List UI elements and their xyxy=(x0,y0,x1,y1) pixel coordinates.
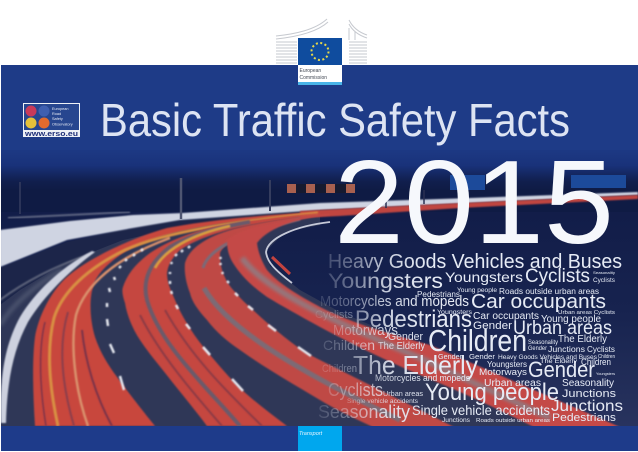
word cloud: Motorways xyxy=(333,322,398,339)
European Commission logo xyxy=(298,38,342,85)
word cloud: Children xyxy=(323,337,375,353)
European Commission building xyxy=(276,19,367,63)
roadside barrier xyxy=(8,212,130,218)
gantry poles xyxy=(180,178,182,219)
word cloud: Seasonality xyxy=(593,270,615,275)
word cloud: Junctions xyxy=(551,398,623,415)
word cloud: Cyclists xyxy=(587,345,615,354)
word cloud: Youngsters xyxy=(445,269,523,285)
word cloud: Young people xyxy=(425,379,559,406)
word cloud: The Elderly xyxy=(353,350,478,380)
word cloud: The Elderly xyxy=(378,341,425,352)
word cloud: Cyclists xyxy=(315,309,353,321)
word cloud: Cyclists xyxy=(593,278,615,284)
band A orange and dark streaks xyxy=(41,213,318,426)
word cloud: Urban areas xyxy=(513,318,612,339)
word cloud: Urban areas xyxy=(484,378,541,389)
Transport tab xyxy=(298,426,342,451)
word cloud: Gender xyxy=(438,354,463,361)
word cloud: Gender xyxy=(473,320,512,332)
word cloud: Youngsters xyxy=(596,371,615,376)
word cloud: Youngsters xyxy=(487,360,527,369)
word cloud: Seasonality xyxy=(318,402,410,422)
word cloud: Pedestrians xyxy=(552,412,617,424)
word cloud: Children xyxy=(322,363,357,375)
word cloud: Youngsters xyxy=(437,310,472,316)
Transport tab: Transport xyxy=(299,431,323,437)
far lane red trail xyxy=(300,195,638,218)
European Commission logo: European xyxy=(300,68,321,74)
word cloud: Young people xyxy=(541,314,601,325)
word cloud: Single vehicle accidents xyxy=(412,402,550,418)
word cloud: Junctions xyxy=(548,345,585,354)
word cloud: Motorways xyxy=(479,367,528,377)
word cloud: Gender xyxy=(528,346,547,352)
word cloud: Youngsters xyxy=(328,270,443,293)
word cloud: Seasonality xyxy=(528,340,558,346)
blue road signs xyxy=(450,175,626,190)
word cloud: Children xyxy=(598,354,615,360)
word cloud: Single vehicle accidents xyxy=(347,399,418,405)
inner white road edge xyxy=(266,222,330,283)
ERSO logo: European xyxy=(52,107,68,111)
ERSO logo: Road xyxy=(52,112,61,116)
word cloud: Gender xyxy=(388,331,423,343)
word cloud: Roads outside urban areas xyxy=(476,418,551,424)
word cloud: Seasonality xyxy=(562,378,614,389)
light trails band A xyxy=(33,212,320,426)
word cloud: Gender xyxy=(528,357,595,382)
word cloud: Urban areas Cyclists xyxy=(558,310,615,316)
word cloud: Motorcycles and mopeds xyxy=(320,293,469,310)
light trails band D xyxy=(226,216,620,426)
band D pale streak xyxy=(242,258,550,418)
word cloud: Pedestrians xyxy=(417,290,460,299)
word cloud: The Elderly xyxy=(558,334,607,345)
word cloud: Cyclists xyxy=(328,380,383,400)
word cloud: Cyclists xyxy=(525,266,590,287)
band B streaks xyxy=(140,222,262,426)
word cloud: Car occupants xyxy=(471,291,606,313)
overhead red signals xyxy=(287,184,355,193)
word cloud: Children xyxy=(581,357,611,367)
light trails band B xyxy=(122,213,320,426)
ERSO logo: Observatory xyxy=(52,122,73,126)
road surface xyxy=(1,211,514,418)
word cloud: Roads outside urban areas xyxy=(499,287,599,296)
light trails band C xyxy=(184,214,454,426)
highway night photo xyxy=(0,145,638,440)
word cloud: Gender xyxy=(469,354,496,361)
bottom band xyxy=(1,426,638,451)
word cloud: Motorcycles and mopeds xyxy=(375,373,470,383)
ERSO logo: www.erso.eu xyxy=(24,131,78,138)
word cloud: Heavy Goods Vehicles and Buses xyxy=(328,251,622,273)
word cloud: Car occupants xyxy=(473,311,539,322)
word cloud: Young people xyxy=(457,287,497,294)
word cloud: Pedestrians xyxy=(355,306,472,333)
lane dashes xyxy=(107,246,311,391)
ERSO logo: Safety xyxy=(52,117,63,121)
word cloud: Children xyxy=(428,323,527,358)
band C grey streak xyxy=(203,219,400,420)
word cloud: Junctions xyxy=(442,418,470,424)
word cloud: The Elderly xyxy=(540,359,577,365)
ERSO logo xyxy=(23,103,80,138)
blue banner background xyxy=(1,65,638,426)
far roadside dark verge xyxy=(0,210,320,305)
year 2015: 2015 xyxy=(334,136,614,269)
word cloud xyxy=(315,251,623,424)
word cloud: Junctions xyxy=(562,388,617,400)
left white edge line xyxy=(1,251,95,423)
word cloud: Heavy Goods Vehicles and Buses xyxy=(498,355,597,361)
far roadside white strip xyxy=(0,192,638,267)
title: Basic Traffic Safety Facts xyxy=(100,94,570,146)
word cloud: Urban areas xyxy=(383,391,424,398)
European Commission logo: Commission xyxy=(300,75,327,81)
